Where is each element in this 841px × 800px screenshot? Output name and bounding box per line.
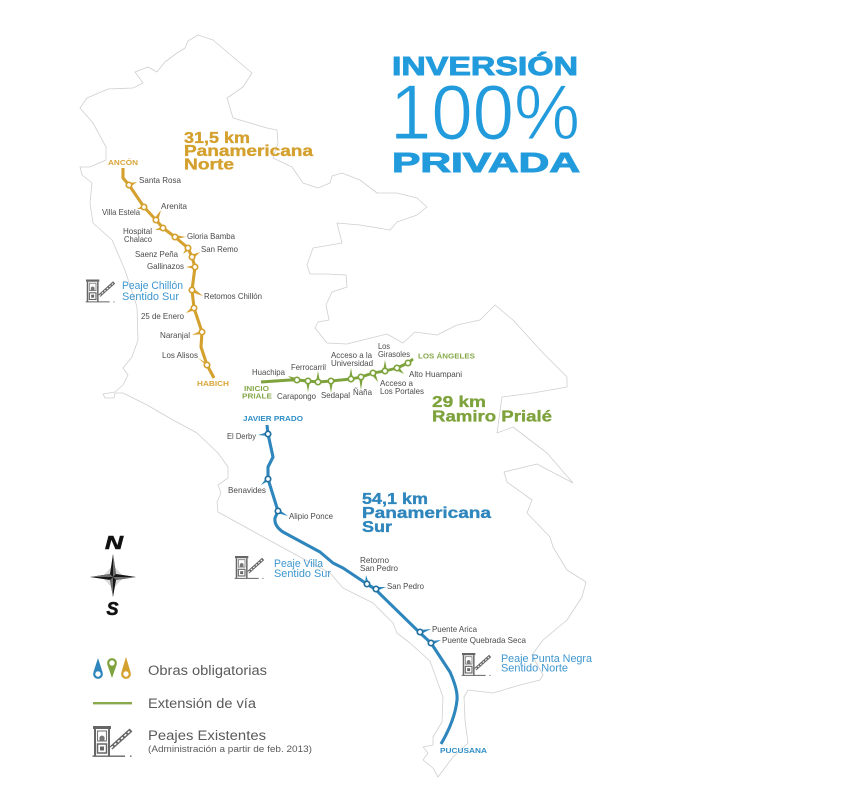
labels: Panamericana Sur stops: Retorno <box>360 556 389 565</box>
labels: Ramiro Prialé stops: Los Portales <box>380 387 424 396</box>
labels: Panamericana Norte stops: Santa Rosa <box>139 176 181 185</box>
labels: Ramiro Prialé stops: LOS ÁNGELES <box>418 352 475 360</box>
labels: Panamericana Norte stops: Villa Estela <box>102 208 140 217</box>
route: Panamericana Sur <box>258 425 457 744</box>
labels: Ramiro Prialé stops: Huachipa <box>252 368 285 377</box>
toll: Peaje Punta Negra: Peaje Punta Negra <box>501 653 593 665</box>
labels: Panamericana Sur stops: San Pedro <box>360 564 398 573</box>
labels: Panamericana Norte stops: Arenita <box>161 202 187 211</box>
heading: 31,5 km Panamericana Norte: 31,5 km <box>184 130 250 147</box>
toll: Peaje Chillón <box>86 280 183 303</box>
toll: Peaje Punta Negra: Sentido Norte <box>501 662 568 674</box>
toll: Peaje Chillón: Sentido Sur <box>122 291 179 303</box>
toll: Peaje Villa <box>235 556 331 580</box>
legend: Extensión de vía: Extensión de vía <box>148 696 257 711</box>
labels: Ramiro Prialé stops: Girasoles <box>378 350 410 359</box>
labels: Ramiro Prialé stops: INICIO <box>244 384 269 393</box>
labels: Panamericana Sur stops: Puente Arica <box>432 625 477 634</box>
labels: Ramiro Prialé stops: Sedapal <box>321 391 350 400</box>
map outline of Lima <box>80 35 586 777</box>
labels: Panamericana Sur stops: San Pedro <box>387 582 424 591</box>
route: Ramiro Prialé <box>261 359 413 393</box>
labels: Panamericana Sur stops <box>227 414 526 755</box>
toll: Peaje Punta Negra <box>462 653 593 675</box>
heading: 31,5 km Panamericana Norte: Norte <box>184 156 234 174</box>
labels: Panamericana Sur stops: Alipio Ponce <box>289 512 333 521</box>
toll: Peaje Villa: Sentido Sur <box>274 568 331 580</box>
legend: Peajes Existentes <box>92 726 312 756</box>
labels: Ramiro Prialé stops: Carapongo <box>277 392 316 401</box>
toll: Peaje Villa: Peaje Villa <box>274 558 324 570</box>
labels: Panamericana Norte stops: HABICH <box>197 379 229 388</box>
labels: Ramiro Prialé stops: Alto Huampani <box>409 370 462 379</box>
labels: Panamericana Norte stops: Gallinazos <box>147 262 184 271</box>
labels: Ramiro Prialé stops: PRIALE <box>242 392 272 400</box>
labels: Panamericana Norte stops: Los Alisos <box>162 351 198 360</box>
title: Inversión 100% Privada: INVERSIÓN <box>392 51 578 81</box>
labels: Panamericana Norte stops: Saenz Peña <box>135 250 178 259</box>
labels: Ramiro Prialé stops: Acceso a <box>380 379 413 388</box>
labels: Ramiro Prialé stops: Ferrocarril <box>291 363 326 372</box>
heading: 54,1 km Panamericana Sur: Sur <box>362 519 392 536</box>
labels: Ramiro Prialé stops: Los <box>378 342 390 351</box>
heading: 29 km Ramiro Prialé <box>432 394 552 426</box>
labels: Ramiro Prialé stops: Universidad <box>331 359 373 368</box>
heading: 54,1 km Panamericana Sur: 54,1 km <box>362 491 428 508</box>
heading: 31,5 km Panamericana Norte <box>184 130 313 174</box>
labels: Panamericana Sur stops: Puente Quebrada Seca <box>442 636 526 645</box>
heading: 29 km Ramiro Prialé: Ramiro Prialé <box>432 408 552 426</box>
heading: 29 km Ramiro Prialé: 29 km <box>432 394 486 411</box>
labels: Ramiro Prialé stops: Acceso a la <box>331 351 372 360</box>
labels: Panamericana Norte stops: San Remo <box>201 245 238 254</box>
compass <box>90 533 136 619</box>
legend: Obras obligatorias: Obras obligatorias <box>148 663 267 678</box>
labels: Panamericana Norte stops: ANCÓN <box>108 158 138 167</box>
labels: Panamericana Sur stops: El Derby <box>227 432 257 441</box>
title: Inversión 100% Privada <box>390 51 580 178</box>
legend: Peajes Existentes: (Administración a partir de feb. 2013) <box>148 744 312 754</box>
heading: 54,1 km Panamericana Sur <box>362 491 491 536</box>
labels: Panamericana Norte stops <box>102 158 262 388</box>
toll: Peaje Chillón: Peaje Chillón <box>122 280 183 292</box>
route: Panamericana Norte <box>123 168 214 378</box>
heading: 31,5 km Panamericana Norte: Panamericana <box>184 143 313 160</box>
labels: Panamericana Sur stops: PUCUSANA <box>440 746 488 755</box>
labels: Panamericana Norte stops: 25 de Enero <box>141 312 184 321</box>
labels: Panamericana Norte stops: Gloria Bamba <box>187 232 235 241</box>
legend: Peajes Existentes: Peajes Existentes <box>148 728 266 743</box>
labels: Panamericana Sur stops: Benavides <box>228 486 266 495</box>
labels: Panamericana Norte stops: Chalaco <box>124 235 152 244</box>
legend: Obras obligatorias <box>94 657 267 678</box>
labels: Ramiro Prialé stops: Ñaña <box>353 387 372 397</box>
compass: S <box>106 599 118 619</box>
heading: 54,1 km Panamericana Sur: Panamericana <box>362 505 491 522</box>
labels: Panamericana Sur stops: JAVIER PRADO <box>243 414 303 423</box>
labels: Ramiro Prialé stops <box>242 342 475 401</box>
labels: Panamericana Norte stops: Hospital <box>123 227 152 236</box>
title: Inversión 100% Privada: 100% <box>390 68 580 156</box>
labels: Panamericana Norte stops: Retomos Chillón <box>204 292 262 301</box>
labels: Panamericana Norte stops: Naranjal <box>160 331 190 340</box>
compass: N <box>105 533 124 553</box>
title: Inversión 100% Privada: PRIVADA <box>392 147 580 178</box>
